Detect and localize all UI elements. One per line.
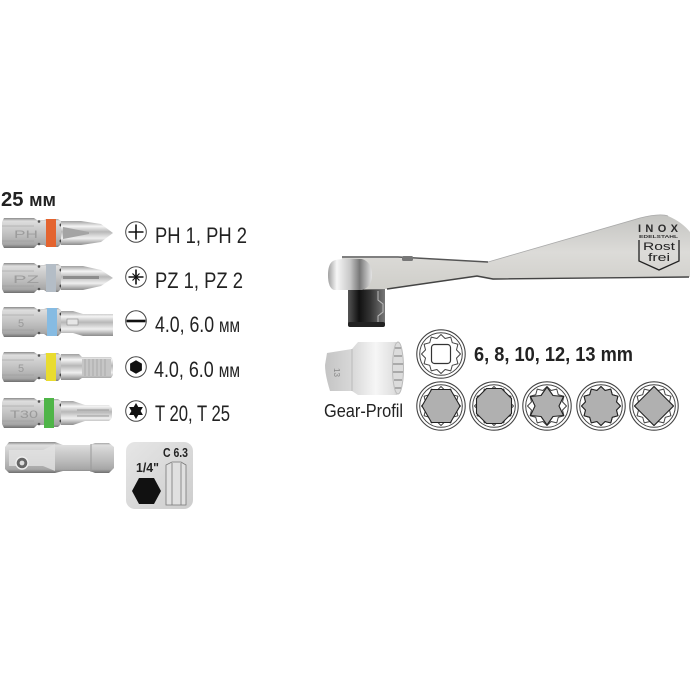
icon: slotted: [126, 311, 146, 331]
panel: drive sizes: [126, 442, 193, 509]
icon: Torx: [126, 401, 146, 421]
logo: INOX Rostfrei: INOX: [638, 223, 679, 235]
bit: PH with orange band: PH: [14, 229, 38, 241]
bit: PH with orange band: [2, 218, 113, 248]
profile: diamond square: [630, 382, 678, 430]
label: slotted sizes: 4.0, 6.0 мм: [155, 312, 240, 337]
label: Gear-Profil: Gear-Profil: [324, 400, 403, 421]
label: hex sizes: 4.0, 6.0 мм: [154, 357, 240, 382]
label: PH sizes: PH 1, PH 2: [155, 223, 247, 248]
ratchet socket drive: [348, 288, 385, 327]
socket with gear profile: 13: [332, 368, 341, 377]
label: 1/4 inch: 1/4": [136, 460, 159, 475]
icon: hexagon: [126, 357, 146, 377]
logo: INOX Rostfrei: EDELSTAHL: [639, 234, 678, 239]
bit: Torx with green band: T30: [10, 409, 38, 421]
ratchet handle: [340, 215, 690, 290]
bit: slotted with blue band: 5: [18, 318, 24, 330]
logo: INOX Rostfrei: frei: [648, 252, 670, 264]
profile: gear: [577, 382, 625, 430]
profile: square drive: [417, 330, 465, 378]
bit: slotted with blue band: [2, 307, 113, 337]
profile: double square: [470, 382, 518, 430]
bit: PZ with grey band: [2, 263, 113, 293]
icon: shank side view: [166, 462, 186, 505]
socket with gear profile: [325, 342, 404, 395]
icon: Pozidriv: [126, 267, 146, 287]
profile: Torx: [523, 382, 571, 430]
profile: hexagon: [417, 382, 465, 430]
logo: INOX Rostfrei: [638, 223, 679, 270]
logo: INOX Rostfrei: Rost: [643, 241, 675, 253]
icon: Phillips: [126, 222, 146, 242]
icon: hex drive: [132, 478, 161, 504]
bit: socket adapter: [5, 442, 114, 473]
label: C 6.3: C 6.3: [163, 445, 188, 460]
bit: PZ with grey band: PZ: [13, 274, 40, 286]
label: Torx sizes: T 20, T 25: [155, 401, 230, 426]
bit: hex with yellow band: 5: [18, 363, 24, 375]
bit: Torx with green band: [2, 398, 112, 428]
ratchet wrench: [328, 215, 690, 327]
ratchet head: [328, 259, 372, 290]
bit: hex with yellow band: [2, 352, 113, 382]
label: PZ sizes: PZ 1, PZ 2: [155, 268, 243, 293]
heading: 25 mm: 25 мм: [1, 189, 56, 211]
label: socket sizes: 6, 8, 10, 12, 13 mm: [474, 344, 633, 366]
